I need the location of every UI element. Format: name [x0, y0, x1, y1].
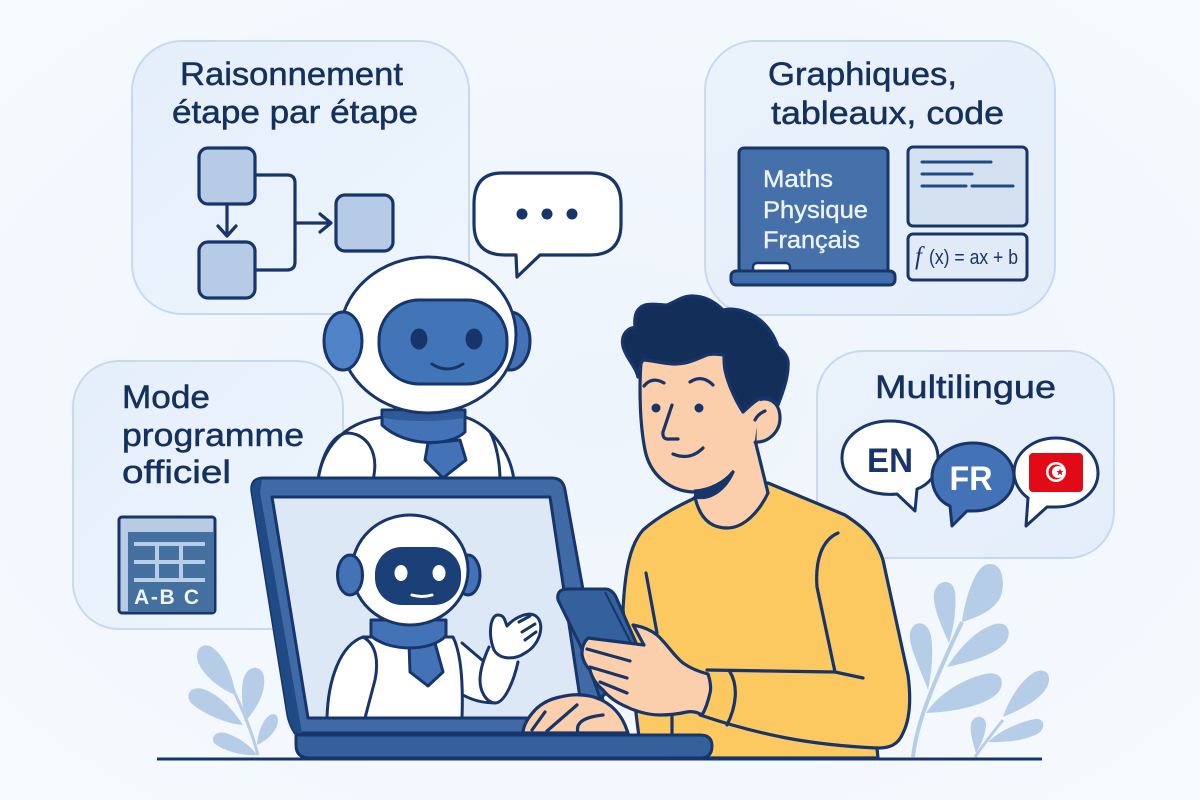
card: formula: f	[915, 243, 925, 270]
heading: multilingue: Multilingue	[875, 369, 1056, 405]
panel: mode programme officiel	[73, 361, 343, 629]
plant: left	[188, 645, 278, 755]
heading: mode programme officiel: programme	[122, 417, 304, 453]
robot collar and tie	[382, 410, 466, 478]
card: formula	[908, 234, 1027, 280]
chin shadow	[695, 472, 733, 498]
neck outline	[695, 440, 768, 528]
ground line	[157, 758, 1042, 760]
face	[640, 340, 760, 492]
hand holding phone	[582, 625, 711, 715]
hand on keyboard	[523, 695, 628, 733]
on-screen robot	[327, 515, 541, 718]
heading: mode programme officiel: officiel	[122, 454, 231, 490]
on-screen collar	[371, 620, 446, 648]
robot face	[379, 300, 507, 384]
icon: timetable	[119, 517, 215, 613]
speech bubble: EN	[842, 421, 938, 511]
robot: assistant behind laptop	[318, 257, 530, 480]
speech bubble: FR	[932, 443, 1014, 526]
panel: graphiques, tableaux, code	[705, 41, 1055, 315]
card: text lines	[908, 147, 1027, 226]
laptop screen	[272, 497, 583, 718]
panel: multilingue	[817, 351, 1114, 558]
robot hand	[491, 614, 541, 658]
heading: raisonnement: Raisonnement	[180, 56, 403, 92]
laptop frame	[252, 478, 603, 733]
laptop base	[296, 735, 712, 758]
heading: raisonnement: étape par étape	[172, 94, 418, 130]
blackboard with subjects	[731, 148, 895, 285]
laptop	[252, 478, 603, 733]
card: formula: (x) = ax + b	[929, 247, 1018, 269]
blackboard with subjects: Maths	[763, 166, 833, 193]
on-screen tie	[409, 643, 443, 686]
speech bubble: Tunisian flag	[1014, 438, 1098, 526]
speech bubble: FR: FR	[950, 460, 992, 498]
phone	[558, 589, 640, 698]
robot body	[318, 417, 514, 480]
facial features	[644, 379, 765, 456]
icon: timetable: A-B C	[134, 586, 199, 609]
on-screen head	[352, 515, 468, 625]
frame shade	[252, 479, 302, 733]
speech bubble: typing dots	[474, 173, 621, 277]
face outline	[640, 362, 733, 492]
speech bubble: EN: EN	[867, 442, 913, 480]
heading: mode programme officiel: Mode	[122, 379, 210, 415]
on-screen face	[375, 547, 461, 605]
flow diagram	[199, 148, 393, 298]
waving arm fill	[458, 640, 518, 703]
on-screen robot body	[327, 637, 462, 718]
blackboard with subjects: Français	[763, 227, 860, 254]
on-screen left ear	[338, 555, 362, 595]
robot head	[340, 257, 516, 413]
waving arm outline	[462, 643, 518, 703]
panel: raisonnement étape par étape	[132, 41, 469, 314]
on-screen right ear	[456, 555, 480, 595]
hair	[622, 296, 788, 412]
ear	[755, 399, 780, 442]
person head	[622, 296, 788, 528]
heading: graphiques: tableaux, code	[771, 95, 1004, 131]
robot ear left	[324, 312, 362, 370]
blackboard with subjects: Physique	[763, 197, 868, 224]
neck	[695, 440, 768, 528]
plant: right	[910, 564, 1049, 757]
sweater	[623, 483, 910, 758]
robot ear right	[490, 312, 530, 370]
heading: graphiques: Graphiques,	[768, 56, 957, 92]
